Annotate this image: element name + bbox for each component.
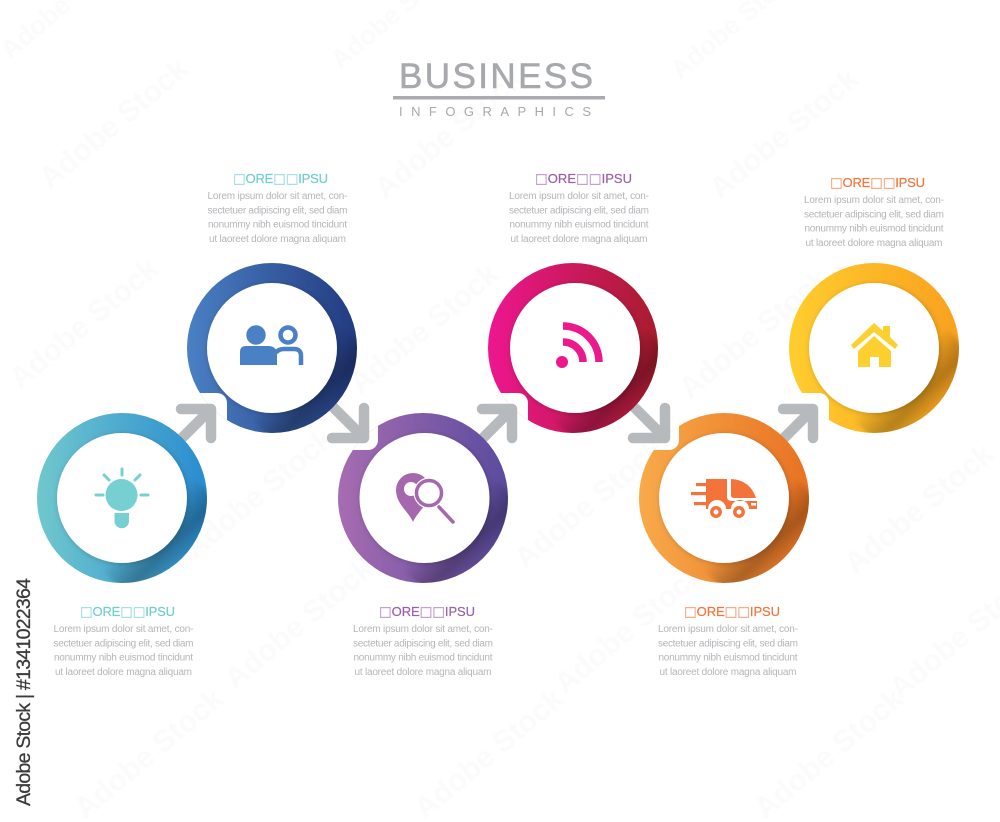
step 2 circle: blue — [187, 263, 357, 433]
icon: delivery truck — [691, 479, 757, 516]
text: Adobe Stock — [343, 257, 505, 400]
step 3 body — [353, 624, 493, 678]
step 1 body: sectetuer adipiscing elit, sed diam — [54, 638, 194, 649]
step 4 body: ut laoreet dolore magna aliquam — [510, 234, 648, 245]
step 3 body: sectetuer adipiscing elit, sed diam — [353, 638, 493, 649]
arrow: step 4 to step 5 — [629, 402, 665, 438]
step 5 body — [658, 624, 798, 678]
icon: map pin with magnifier — [396, 473, 453, 522]
step 5 body: nonummy nibh euismod tincidunt — [658, 653, 798, 664]
step 3 heading: □ORE□□IPSU — [379, 604, 475, 620]
step 2 heading: □ORE□□IPSU — [233, 171, 328, 187]
step 1 body — [54, 624, 194, 678]
step 4 body: nonummy nibh euismod tincidunt — [510, 220, 649, 231]
arrow: step 3 to step 4 — [476, 409, 512, 445]
arrow: step 2 to step 3 — [328, 402, 364, 438]
icon: rss signal — [556, 326, 599, 368]
step 5 heading: □ORE□□IPSU — [684, 604, 780, 620]
heading: BUSINESS: BUSINESS — [399, 57, 593, 96]
text: Adobe Stock — [748, 682, 910, 822]
icon: house — [851, 323, 898, 367]
text: Adobe Stock — [3, 252, 165, 395]
arrow: step 1 to step 2 — [175, 409, 211, 445]
text: Adobe Stock — [218, 552, 380, 695]
subheading: INFOGRAPHICS: INFOGRAPHICS — [399, 104, 591, 119]
text: Adobe Stock — [178, 422, 340, 565]
text block: step 4 — [509, 171, 649, 245]
step 2 body: Lorem ipsum dolor sit amet, con- — [208, 191, 348, 202]
text: Adobe Stock — [33, 52, 195, 195]
step 2 body: nonummy nibh euismod tincidunt — [208, 220, 347, 231]
text block: step 1 — [54, 604, 194, 678]
title — [393, 57, 605, 119]
step 6 circle: yellow — [789, 263, 959, 433]
step 1 heading: □ORE□□IPSU — [80, 604, 175, 620]
text: Adobe Stock — [838, 437, 1000, 580]
step 2 body — [208, 191, 348, 245]
step 6 body: Lorem ipsum dolor sit amet, con- — [804, 195, 944, 206]
text: Adobe Stock — [408, 682, 570, 822]
step 4 circle: magenta — [488, 263, 658, 433]
step 3 body: Lorem ipsum dolor sit amet, con- — [353, 624, 493, 635]
step 1 circle: teal — [37, 413, 207, 583]
step 6 heading: □ORE□□IPSU — [830, 175, 925, 191]
step 6 body — [804, 195, 944, 249]
step 5 circle: orange — [639, 413, 809, 583]
step 5 body: Lorem ipsum dolor sit amet, con- — [658, 624, 798, 635]
step 5 body: sectetuer adipiscing elit, sed diam — [658, 638, 798, 649]
step 6 body: nonummy nibh euismod tincidunt — [804, 224, 944, 235]
icon: two people — [240, 325, 301, 365]
icon: light bulb — [96, 469, 148, 528]
side credit text: Adobe Stock | #1341022364 — [13, 578, 35, 806]
text: Adobe Stock — [68, 682, 230, 822]
step 4 body — [509, 191, 649, 245]
text: Adobe Stock — [673, 262, 835, 405]
step 1 body: nonummy nibh euismod tincidunt — [54, 653, 193, 664]
step 1 body: ut laoreet dolore magna aliquam — [55, 667, 192, 678]
step 2 body: ut laoreet dolore magna aliquam — [209, 234, 346, 245]
arrow: step 5 to step 6 — [777, 409, 813, 445]
step 4 body: sectetuer adipiscing elit, sed diam — [509, 205, 649, 216]
step 3 body: nonummy nibh euismod tincidunt — [354, 653, 493, 664]
step 3 body: ut laoreet dolore magna aliquam — [354, 667, 492, 678]
text: Adobe Stock — [548, 557, 710, 700]
step 4 body: Lorem ipsum dolor sit amet, con- — [509, 191, 649, 202]
text: Adobe Stock — [368, 62, 530, 205]
text block: step 5 — [658, 604, 798, 678]
step 1 body: Lorem ipsum dolor sit amet, con- — [54, 624, 194, 635]
text block: step 6 — [804, 175, 944, 249]
step 2 body: sectetuer adipiscing elit, sed diam — [208, 205, 348, 216]
step 6 body: ut laoreet dolore magna aliquam — [806, 238, 942, 249]
text: Adobe Stock — [703, 62, 865, 205]
step 5 body: ut laoreet dolore magna aliquam — [660, 667, 796, 678]
text block: step 2 — [208, 171, 348, 245]
step 3 circle: purple — [338, 413, 508, 583]
text block: step 3 — [353, 604, 493, 678]
step 6 body: sectetuer adipiscing elit, sed diam — [804, 209, 944, 220]
text: Adobe Stock — [508, 432, 670, 575]
step 4 heading: □ORE□□IPSU — [535, 171, 632, 187]
